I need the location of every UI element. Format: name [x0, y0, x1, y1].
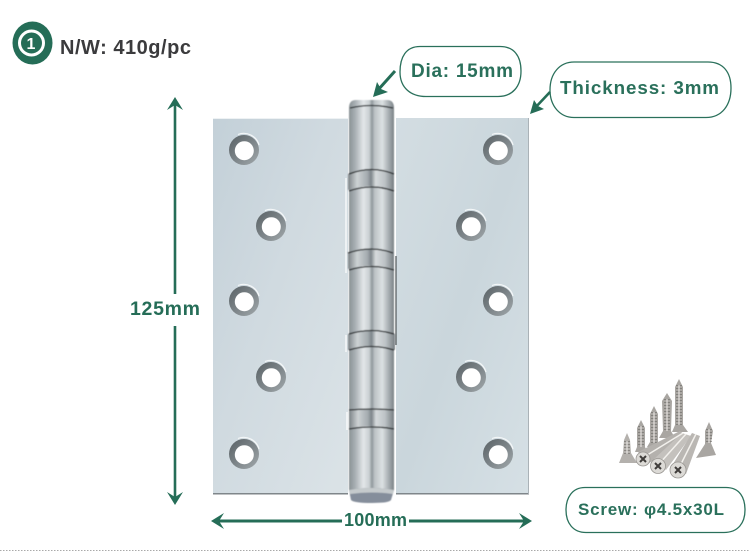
standing screws [619, 379, 716, 463]
screw holes: right leaf [456, 133, 513, 469]
callout: thickness: Thickness: 3mm [560, 77, 719, 98]
knuckle band 3 [348, 330, 395, 350]
knuckle band 1 [348, 170, 394, 191]
callout: thickness [550, 62, 731, 118]
callout: diameter [400, 46, 521, 96]
hinge [213, 100, 529, 503]
highlight and shadow slits [346, 178, 396, 430]
arrow: diameter [373, 71, 395, 97]
callout: screw size [566, 488, 745, 532]
badge: number 1: 1 [27, 36, 36, 53]
dimension: 100mm width: 100mm [344, 510, 407, 530]
arrow: thickness [530, 92, 550, 114]
pin cap bottom [349, 488, 394, 503]
lying screws [636, 431, 700, 478]
net weight text: N/W: 410g/pc [60, 37, 191, 59]
dimension: 125mm height [130, 97, 200, 505]
dimension: 125mm height: 125mm [130, 298, 200, 320]
screws illustration [619, 379, 716, 478]
callout: diameter: Dia: 15mm [411, 61, 513, 82]
knuckle band 4 [349, 409, 394, 429]
callout: screw size: Screw: φ4.5x30L [578, 500, 724, 519]
dimension: 100mm width [211, 510, 532, 530]
badge: number 1 [12, 22, 52, 64]
right leaf [396, 118, 529, 494]
pin cap top [350, 106, 393, 108]
barrel [348, 100, 395, 503]
screw holes: left leaf [229, 133, 286, 469]
left leaf [213, 118, 348, 494]
knuckle band 2 [348, 249, 394, 270]
